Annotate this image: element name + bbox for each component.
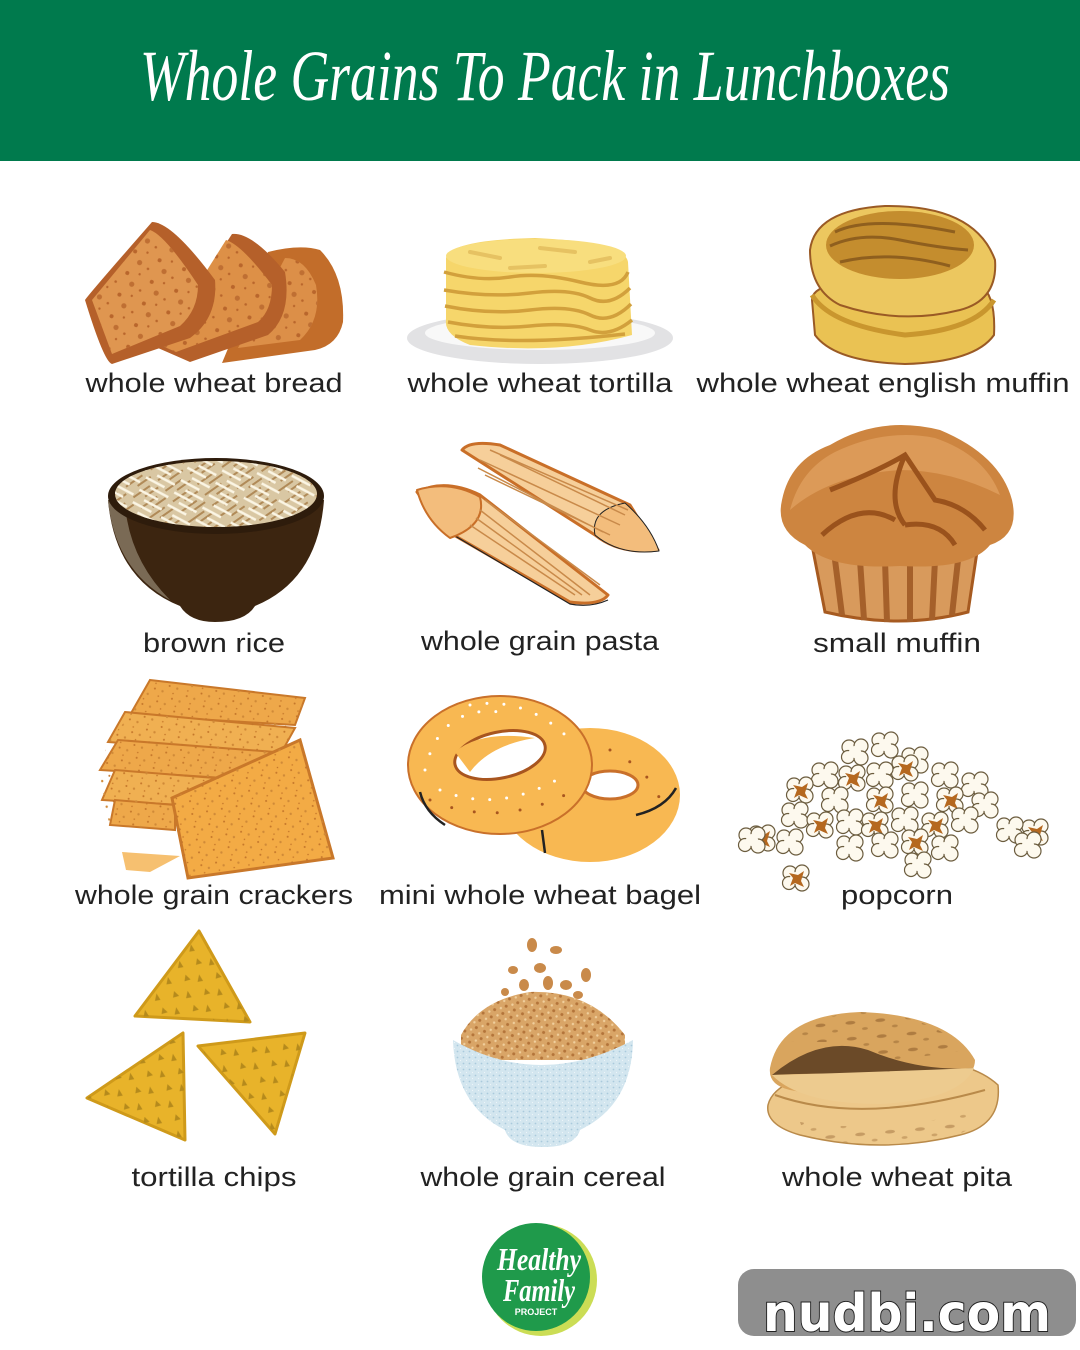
- icon: whole grain pasta: [417, 443, 659, 605]
- watermark: nudbi.com: [763, 1284, 1051, 1344]
- label: whole wheat bread: whole wheat bread: [84, 368, 343, 398]
- label: small muffin: small muffin: [813, 628, 981, 658]
- label: whole grain pasta: whole grain pasta: [420, 626, 660, 656]
- icon: tortilla chips: [87, 931, 305, 1140]
- label: whole grain crackers: whole grain crackers: [74, 880, 353, 910]
- label: whole wheat tortilla: whole wheat tortilla: [406, 368, 674, 398]
- logo: Healthy Family Project: Family: [502, 1272, 576, 1308]
- icon: whole grain crackers: [100, 680, 333, 878]
- icon: whole wheat bread: [85, 222, 343, 364]
- label: whole wheat english muffin: whole wheat english muffin: [695, 368, 1070, 398]
- logo: Healthy Family Project: PROJECT: [515, 1307, 558, 1317]
- icon: small muffin: [781, 425, 1014, 622]
- icon: mini whole wheat bagel: [408, 696, 680, 862]
- label: tortilla chips: tortilla chips: [132, 1162, 296, 1192]
- label: popcorn: popcorn: [841, 880, 953, 910]
- icon: whole grain cereal: [453, 938, 633, 1147]
- icon: whole wheat english muffin: [810, 206, 995, 364]
- label: mini whole wheat bagel: mini whole wheat bagel: [379, 880, 701, 910]
- icon: brown rice: [108, 458, 324, 622]
- icon: whole wheat pita: [768, 1012, 998, 1145]
- title banner: [0, 0, 1080, 161]
- label: whole grain cereal: whole grain cereal: [419, 1162, 666, 1192]
- icon: popcorn: [738, 732, 1048, 891]
- icon: whole wheat tortilla: [407, 238, 673, 364]
- label: brown rice: brown rice: [143, 628, 285, 658]
- logo: Healthy Family Project: Healthy: [496, 1241, 582, 1277]
- label: whole wheat pita: whole wheat pita: [781, 1162, 1013, 1192]
- logo: Healthy Family Project: [482, 1223, 597, 1336]
